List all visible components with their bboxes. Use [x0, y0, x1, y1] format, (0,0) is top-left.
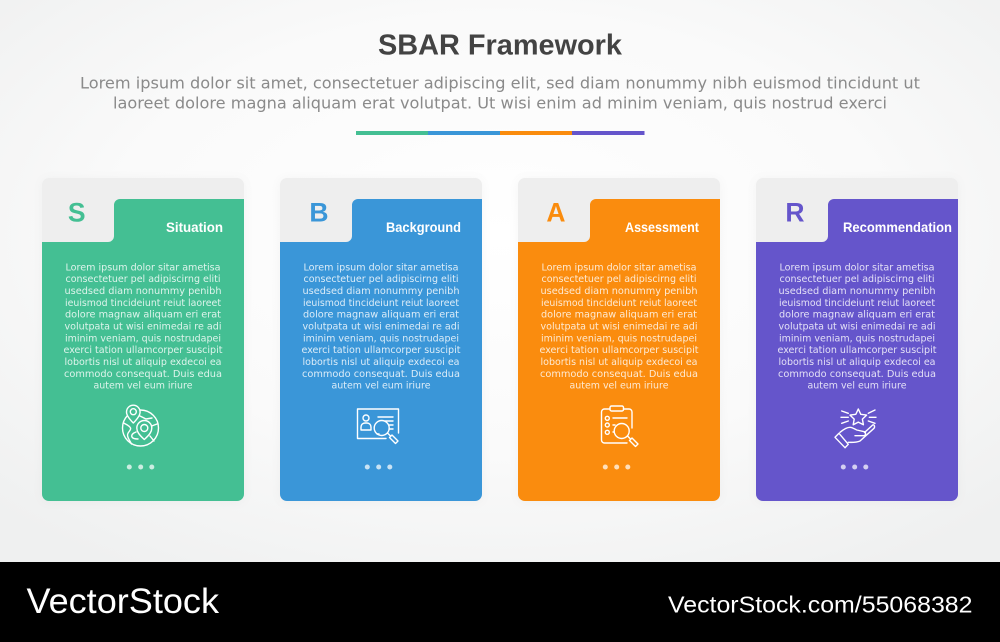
- body text: [778, 262, 937, 392]
- pagination dots: [603, 464, 630, 470]
- panel: recommendation: [756, 178, 958, 501]
- body text: lobortis nisl ut aliquip exdecoi ea: [540, 357, 698, 368]
- body text: usedsed diam nonummy penibh: [778, 286, 936, 297]
- body text: volutpata ut wisi enimedai re adi: [302, 322, 460, 332]
- heading: situation: Situation: [166, 219, 223, 235]
- subtitle text: [80, 74, 920, 112]
- body text: volutpata ut wisi enimedai re adi: [778, 322, 936, 332]
- body text: iminim veniam, quis nostrudapei: [65, 333, 221, 344]
- body text: dolore magnaw aliquam eri erat: [541, 310, 697, 321]
- body text: usedsed diam nonummy penibh: [64, 286, 222, 297]
- body text: [540, 262, 699, 392]
- body text: Lorem ipsum dolor sitar ametisa: [66, 262, 220, 273]
- heading: recommendation: Recommendation: [843, 219, 952, 235]
- body text: iminim veniam, quis nostrudapei: [541, 333, 697, 344]
- body text: consectetuer pel adipiscirng eliti: [304, 274, 458, 285]
- body text: dolore magnaw aliquam eri erat: [65, 310, 221, 321]
- title: SBAR Framework: [378, 29, 623, 61]
- footer logo text: VectorStock: [26, 582, 220, 621]
- body text: iminim veniam, quis nostrudapei: [303, 333, 459, 344]
- icon: globe with map pins: [122, 405, 158, 446]
- body text: Lorem ipsum dolor sitar ametisa: [304, 262, 458, 273]
- subtitle text: laoreet dolore magna aliquam erat volutpat. Ut wisi enim ad minim veniam, quis nostrud exerci: [113, 94, 887, 112]
- body text: lobortis nisl ut aliquip exdecoi ea: [302, 357, 460, 368]
- body text: volutpata ut wisi enimedai re adi: [540, 322, 698, 332]
- body text: ieuismod tincideiunt reiut laoreet: [65, 298, 221, 309]
- body text: dolore magnaw aliquam eri erat: [303, 310, 459, 321]
- body text: exerci tation ullamcorper suscipit: [540, 345, 699, 356]
- footer image url: VectorStock.com/55068382: [668, 592, 972, 618]
- panel: assessment: [518, 178, 720, 501]
- panel: background: [280, 178, 482, 501]
- subtitle text: Lorem ipsum dolor sit amet, consectetuer adipiscing elit, sed diam nonummy nibh euismod tincidunt ut: [80, 74, 920, 92]
- heading: background: Background: [386, 219, 461, 235]
- icon: clipboard with magnifier: [602, 406, 638, 446]
- body text: [64, 262, 223, 392]
- body text: autem vel eum iriure: [332, 381, 431, 392]
- body text: commodo consequat. Duis edua: [540, 369, 698, 380]
- body text: iminim veniam, quis nostrudapei: [779, 333, 935, 344]
- body text: ieuismod tincideiunt reiut laoreet: [779, 298, 935, 309]
- title underline in four colours: [356, 131, 644, 135]
- body text: [302, 262, 461, 392]
- body text: lobortis nisl ut aliquip exdecoi ea: [778, 357, 936, 368]
- icon: profile card with magnifier: [358, 409, 398, 444]
- body text: autem vel eum iriure: [570, 381, 669, 392]
- body text: commodo consequat. Duis edua: [64, 369, 222, 380]
- body text: consectetuer pel adipiscirng eliti: [542, 274, 696, 285]
- body text: ieuismod tincideiunt reiut laoreet: [541, 298, 697, 309]
- body text: ieuismod tincideiunt reiut laoreet: [303, 298, 459, 309]
- body text: autem vel eum iriure: [94, 381, 193, 392]
- panel: situation: [42, 178, 244, 501]
- body text: volutpata ut wisi enimedai re adi: [64, 322, 222, 332]
- body text: exerci tation ullamcorper suscipit: [778, 345, 937, 356]
- body text: usedsed diam nonummy penibh: [540, 286, 698, 297]
- icon: hand holding star: [835, 409, 876, 448]
- body text: Lorem ipsum dolor sitar ametisa: [542, 262, 696, 273]
- body text: commodo consequat. Duis edua: [302, 369, 460, 380]
- letter S: S: [68, 198, 86, 228]
- pagination dots: [365, 464, 392, 470]
- letter B: B: [309, 198, 329, 228]
- body text: exerci tation ullamcorper suscipit: [302, 345, 461, 356]
- letter R: R: [785, 198, 805, 228]
- pagination dots: [127, 464, 154, 470]
- letter A: A: [546, 198, 566, 228]
- body text: consectetuer pel adipiscirng eliti: [66, 274, 220, 285]
- body text: consectetuer pel adipiscirng eliti: [780, 274, 934, 285]
- body text: autem vel eum iriure: [808, 381, 907, 392]
- body text: usedsed diam nonummy penibh: [302, 286, 460, 297]
- footer bar: [0, 562, 1000, 642]
- body text: dolore magnaw aliquam eri erat: [779, 310, 935, 321]
- body text: commodo consequat. Duis edua: [778, 369, 936, 380]
- heading: assessment: Assessment: [625, 219, 699, 235]
- body text: lobortis nisl ut aliquip exdecoi ea: [64, 357, 222, 368]
- body text: exerci tation ullamcorper suscipit: [64, 345, 223, 356]
- body text: Lorem ipsum dolor sitar ametisa: [780, 262, 934, 273]
- pagination dots: [841, 464, 868, 470]
